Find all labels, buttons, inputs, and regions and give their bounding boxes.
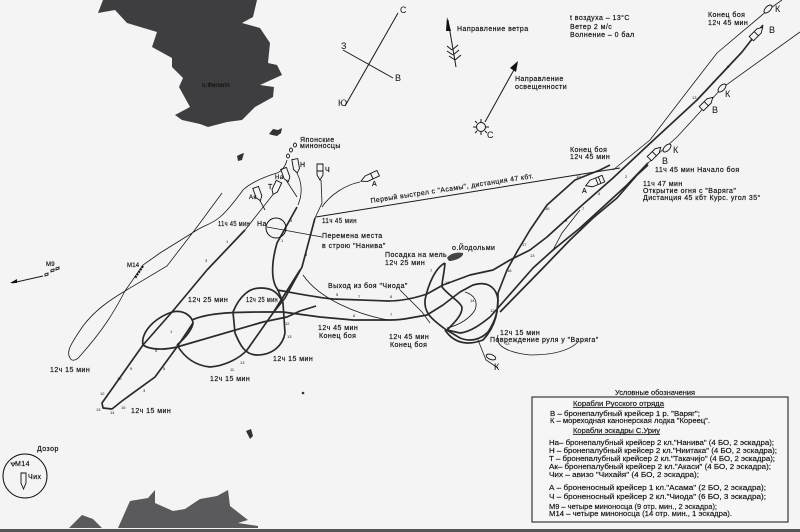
- callout: change of position: в строю "Нанива": [322, 243, 386, 250]
- ships of the Russian squadron: В: [769, 25, 775, 35]
- tiny time ticks: [96, 64, 730, 415]
- time and event labels: 12ч 15 мин: [210, 376, 250, 383]
- legend: Ак– бронепалубный крейсер 2 кл."Акаси" (4 БО, 2 эскадра);: [549, 463, 771, 471]
- tiny time ticks: 1: [226, 239, 229, 244]
- legend: М14 – четыре миноносца (14 отр. мин., 1 эскадра).: [549, 511, 732, 518]
- tiny time ticks: 13: [530, 253, 535, 258]
- compass: З: [341, 41, 346, 51]
- legend: На– бронепалубный крейсер 2 кл."Нанива" (4 БО, 2 эскадра);: [549, 439, 774, 447]
- ships of the Russian squadron: В: [662, 156, 668, 166]
- time and event labels: 11ч 45 мин: [322, 218, 357, 225]
- ships of the Japanese squadron: На: [257, 221, 267, 228]
- legend: Т – бронепалубный крейсер 2 кл."Такачиjо" (4 БО, 2 эскадра);: [549, 455, 775, 463]
- tiny time ticks: 12: [285, 321, 290, 326]
- callout: exit of Chiyoda: Выход из боя "Чиода": [328, 282, 408, 290]
- icon: sun and light direction: [473, 61, 567, 140]
- tiny time ticks: 9: [565, 218, 568, 223]
- time and event labels: миноносцы: [300, 143, 341, 150]
- time and event labels: 11ч 45 мин Начало боя: [655, 166, 740, 174]
- tiny time ticks: 11: [230, 367, 235, 372]
- ships of the Russian squadron: К: [725, 89, 731, 99]
- tiny time ticks: 7: [430, 268, 433, 273]
- tiny time ticks: 14: [110, 410, 115, 415]
- icon: sun and light direction: С: [487, 130, 494, 140]
- tiny time ticks: 1: [281, 238, 284, 243]
- tiny time ticks: 19: [576, 174, 581, 179]
- tiny time ticks: 7: [712, 80, 715, 85]
- tiny time ticks: 18: [507, 268, 512, 273]
- tiny time ticks: 5: [336, 292, 339, 297]
- ships of the Japanese squadron: Т: [268, 184, 273, 191]
- time and event labels: 12ч 45 мин: [570, 154, 610, 161]
- bottom land: [69, 490, 258, 528]
- tracks heading south: [207, 173, 430, 323]
- destroyers and their track: М14: [127, 263, 140, 269]
- island: Iodolmi: [447, 243, 495, 261]
- destroyers and their track: [69, 143, 297, 360]
- western loops: [102, 270, 316, 409]
- callout: first shot line: [316, 168, 620, 217]
- patrol inset: М14: [15, 461, 30, 468]
- legend: Ч – броненосный крейсер 2 кл."Чиода" (6 БО, 3 эскадра);: [549, 493, 766, 501]
- ships of the Russian squadron: К: [673, 145, 679, 155]
- island: Philip: [98, 0, 282, 127]
- time and event labels: 12ч 25 мин: [385, 260, 425, 267]
- legend: Н – бронепалубный крейсер 2 кл."Ниитака" (4 БО, 2 эскадра);: [549, 447, 777, 455]
- tiny time ticks: 4: [598, 191, 601, 196]
- time and event labels: Посадка на мель: [385, 252, 447, 259]
- time and event labels: 12ч 45 мин: [708, 20, 748, 27]
- destroyers M9: [10, 262, 59, 283]
- tiny time ticks: 3: [205, 258, 208, 263]
- tiny time ticks: 12: [100, 391, 105, 396]
- legend: Условные обозначения: [615, 389, 695, 397]
- bottom edge: [0, 529, 800, 532]
- time and event labels: Конец боя: [708, 11, 745, 19]
- time and event labels: 12ч 25 мин: [188, 297, 228, 304]
- time and event labels: Конец боя: [319, 332, 356, 340]
- tiny time ticks: 3: [143, 388, 146, 393]
- tiny time ticks: 17: [522, 242, 527, 247]
- ships of the Russian squadron: К: [494, 362, 500, 372]
- legend: Корабли эскадры С.Уриу: [573, 427, 661, 435]
- tiny time ticks: 5: [727, 64, 730, 69]
- time and event labels: [50, 11, 761, 415]
- time and event labels: 12ч 25 мин: [246, 297, 278, 304]
- tiny time ticks: 15: [121, 405, 126, 410]
- tiny time ticks: 1: [170, 329, 173, 334]
- time and event labels: Дистанция 45 кбт Курс. угол 35°: [643, 194, 761, 202]
- tiny time ticks: 7: [390, 312, 393, 317]
- time and event labels: Открытие огня с "Варяга": [643, 188, 736, 195]
- time and event labels: Повреждение руля у "Варяга": [490, 337, 599, 344]
- icon: sun and light direction: освещенности: [515, 84, 567, 91]
- ships of the Russian squadron: К: [775, 4, 781, 14]
- time and event labels: Конец боя: [570, 146, 607, 154]
- tiny time ticks: 3: [290, 218, 293, 223]
- tiny time ticks: 7: [358, 294, 361, 299]
- weather note: t воздуха – 13°С: [570, 14, 630, 22]
- legend: В – бронепалубный крейсер 1 р. "Варяг";: [550, 410, 700, 418]
- tiny time ticks: 13: [240, 360, 245, 365]
- tiny time ticks: 14: [470, 298, 475, 303]
- ships of the Japanese squadron: Н: [300, 162, 306, 169]
- ships of the Russian squadron: [485, 4, 781, 372]
- loops at grounding site: [425, 263, 476, 330]
- tiny time ticks: 12: [490, 308, 495, 313]
- tiny time ticks: 2: [625, 174, 628, 179]
- callout: first shot line: Первый выстрел с "Асамы", дистанция 47 кбт.: [370, 172, 534, 205]
- time and event labels: 12ч 15 мин: [131, 408, 171, 415]
- time and event labels: 12ч 45 мин: [318, 325, 358, 332]
- ships of the Russian squadron: В: [712, 105, 718, 115]
- icon: wind arrow: Направление ветра: [457, 26, 529, 33]
- time and event labels: 12ч 15 мин: [50, 367, 90, 374]
- patrol inset: Дозор: [37, 446, 59, 453]
- tiny time ticks: 13: [96, 407, 101, 412]
- legend: К – мореходная канонерская лодка "Кореец".: [550, 418, 710, 425]
- time and event labels: 11ч 45 мин: [218, 221, 250, 228]
- callout: change of position: Перемена места: [322, 233, 383, 240]
- legend: Чих – авизо "Чихайя" (4 БО, 2 эскадра);: [549, 471, 699, 479]
- compass: С: [400, 5, 407, 15]
- weather note: Ветер 2 м/с: [570, 24, 612, 31]
- tiny time ticks: 5: [155, 348, 158, 353]
- weather note: Волнение – 0 бал: [570, 31, 635, 39]
- tiny time ticks: 8: [390, 294, 393, 299]
- ships of the Japanese squadron: Ак: [249, 195, 257, 201]
- time and event labels: Конец боя: [390, 341, 427, 349]
- tiny time ticks: 10: [117, 376, 122, 381]
- patrol inset: [3, 446, 59, 498]
- tiny time ticks: 13: [505, 341, 510, 346]
- legend: [532, 389, 788, 522]
- legend: Корабли Русского отряда: [573, 400, 664, 408]
- time and event labels: 11ч 47 мин: [643, 181, 683, 188]
- time and event labels: 12ч 45 мин: [389, 334, 429, 341]
- small islands: [237, 128, 304, 439]
- ships of the Japanese squadron: А: [372, 181, 377, 188]
- ships of the Japanese squadron: [249, 159, 605, 228]
- tiny time ticks: 9: [130, 366, 133, 371]
- compass: Ю: [338, 98, 347, 108]
- compass: [338, 5, 407, 108]
- tiny time ticks: 5: [163, 366, 166, 371]
- tiny time ticks: 6: [353, 313, 356, 318]
- island: Philip: о.Филипп: [202, 83, 230, 89]
- icon: sun and light direction: Направление: [515, 76, 564, 83]
- weather note: [570, 14, 635, 39]
- tiny time ticks: 16: [545, 206, 550, 211]
- island: Iodolmi: о.Йодольми: [452, 243, 495, 252]
- compass: В: [395, 73, 401, 83]
- tiny time ticks: 7: [582, 206, 585, 211]
- ships of the Japanese squadron: На: [275, 175, 284, 181]
- patrol inset: Чих: [28, 474, 41, 481]
- icon: wind arrow: [446, 17, 529, 67]
- time and event labels: Японские: [300, 137, 335, 144]
- tiny time ticks: 3: [305, 252, 308, 257]
- tiny time ticks: 13: [287, 334, 292, 339]
- time and event labels: 12ч 15 мин: [273, 356, 313, 363]
- time and event labels: 12ч 15 мин: [500, 330, 540, 337]
- callout: change of position: [266, 218, 386, 250]
- tiny time ticks: 12: [445, 280, 450, 285]
- legend: М9 – четыре миноносца (9 отр. мин., 2 эскадра);: [549, 504, 717, 511]
- tiny time ticks: 13: [692, 95, 697, 100]
- ships of the Japanese squadron: Ч: [325, 167, 330, 174]
- destroyers M9: М9: [46, 262, 55, 268]
- ships of the Japanese squadron: А: [582, 188, 587, 195]
- legend: А – броненосный крейсер 1 кл."Асама" (2 БО, 2 эскадра);: [549, 484, 766, 492]
- north-east course tracks: [192, 0, 800, 368]
